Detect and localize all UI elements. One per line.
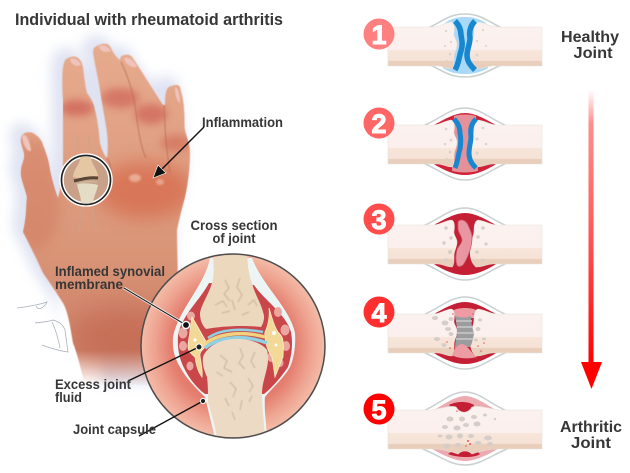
badge 2: 2 bbox=[371, 109, 387, 139]
tendon lines bbox=[77, 135, 96, 232]
joint capsule bbox=[173, 258, 295, 438]
upper bone bbox=[200, 255, 264, 329]
label: inflamed synovial membrane: Inflamed synovial bbox=[55, 264, 165, 279]
hand shadow bbox=[14, 39, 183, 390]
badge 5 bbox=[364, 394, 394, 425]
arrow: progression bbox=[581, 90, 602, 389]
label: inflamed synovial membrane bbox=[55, 264, 190, 329]
label: excess joint fluid: Excess joint bbox=[55, 377, 131, 392]
badge 5: 5 bbox=[371, 395, 387, 425]
synovial membrane bbox=[178, 283, 292, 394]
label: healthy joint: Joint bbox=[574, 45, 613, 62]
arrow: inflammation bbox=[153, 127, 204, 178]
bone texture bbox=[215, 278, 257, 420]
cartilage bbox=[208, 330, 263, 338]
label: excess joint fluid: fluid bbox=[55, 390, 82, 405]
label: joint capsule bbox=[73, 398, 206, 437]
joint stage 2 bbox=[388, 108, 542, 180]
fingernails bbox=[22, 45, 180, 151]
label: inflamed synovial membrane: membrane bbox=[55, 277, 123, 292]
label: excess joint fluid bbox=[55, 344, 202, 405]
label: cross section: of joint bbox=[212, 231, 256, 246]
label: arthritic joint bbox=[560, 419, 622, 452]
badge 4 bbox=[364, 296, 394, 328]
inset: magnified finger joint bbox=[62, 156, 110, 204]
label: healthy joint bbox=[561, 29, 619, 62]
label: inflammation bbox=[153, 115, 283, 178]
cross section of joint bbox=[141, 254, 325, 438]
inset bones bbox=[73, 157, 98, 178]
title: Individual with rheumatoid arthritis bbox=[15, 10, 283, 29]
illustration: hand bbox=[9, 39, 193, 390]
excess joint fluid bbox=[188, 317, 207, 377]
badge 2 bbox=[364, 108, 394, 139]
joint stage 5 bbox=[388, 392, 542, 465]
badge 3 bbox=[364, 204, 394, 235]
label: arthritic joint: Joint bbox=[571, 435, 612, 452]
badge 1: 1 bbox=[371, 20, 387, 50]
label: inflammation: Inflammation bbox=[202, 115, 283, 130]
inflammation shading bbox=[9, 88, 193, 365]
finger separation lines bbox=[107, 62, 170, 178]
label: joint capsule: Joint capsule bbox=[73, 422, 156, 437]
label: arthritic joint: Arthritic bbox=[560, 419, 622, 436]
badge 4: 4 bbox=[371, 298, 387, 328]
label: healthy joint: Healthy bbox=[561, 29, 619, 46]
lower bone bbox=[203, 339, 268, 438]
joint stage 3 bbox=[388, 208, 542, 280]
hand silhouette bbox=[21, 44, 190, 385]
badge 3: 3 bbox=[371, 205, 387, 235]
label: cross section bbox=[190, 218, 278, 246]
joint stage 1 bbox=[388, 14, 542, 77]
label: cross section: Cross section bbox=[190, 218, 278, 233]
joint stage 4 bbox=[388, 297, 542, 369]
signature bbox=[17, 302, 68, 352]
badge 1 bbox=[364, 18, 394, 50]
